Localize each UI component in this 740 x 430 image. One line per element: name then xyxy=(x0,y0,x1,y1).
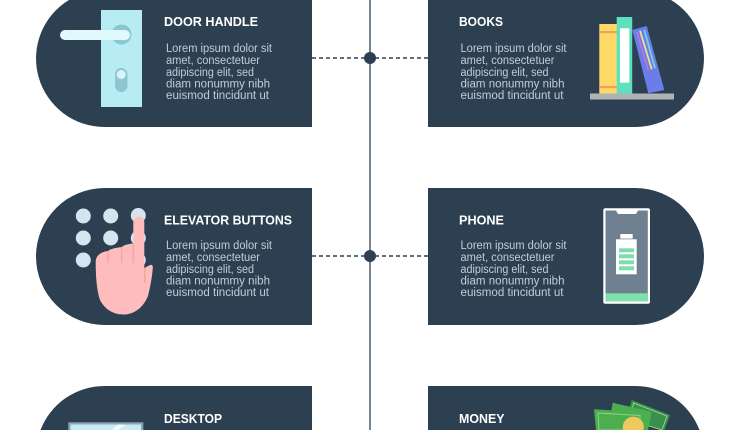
text block: books xyxy=(460,43,567,102)
heading: books: BOOKS xyxy=(459,15,503,29)
text block: elevator buttons: euismod tincidunt ut xyxy=(166,287,270,299)
heading: money: MONEY xyxy=(459,412,505,426)
text block: books: diam nonummy nibh xyxy=(460,78,564,90)
text block: phone: adipiscing elit, sed xyxy=(460,264,548,276)
text block: elevator buttons: amet, consectetuer xyxy=(166,252,260,264)
text block: elevator buttons: Lorem ipsum dolor sit xyxy=(166,240,273,252)
panel: phone xyxy=(428,188,704,325)
icon: phone with battery xyxy=(603,208,650,304)
text block: door handle: euismod tincidunt ut xyxy=(166,90,270,102)
panel: elevator buttons xyxy=(36,188,312,325)
icon: hand pressing elevator buttons xyxy=(76,208,153,314)
text block: elevator buttons: diam nonummy nibh xyxy=(166,276,270,288)
text block: door handle xyxy=(166,43,273,102)
heading: phone: PHONE xyxy=(459,214,504,228)
panel: money xyxy=(428,386,700,430)
text block: phone xyxy=(460,240,567,299)
icon: money notes and coin xyxy=(594,400,670,430)
text block: books: Lorem ipsum dolor sit xyxy=(460,43,567,55)
panel: books xyxy=(428,0,704,127)
text block: phone: euismod tincidunt ut xyxy=(460,287,564,299)
text block: elevator buttons: adipiscing elit, sed xyxy=(166,264,254,276)
central timeline xyxy=(312,0,428,430)
text block: phone: Lorem ipsum dolor sit xyxy=(460,240,567,252)
text block: door handle: diam nonummy nibh xyxy=(166,78,270,90)
panel: desktop xyxy=(40,386,312,430)
heading: desktop: DESKTOP xyxy=(164,412,222,426)
text block: door handle: adipiscing elit, sed xyxy=(166,67,254,79)
panel: door handle xyxy=(36,0,312,127)
text block: books: amet, consectetuer xyxy=(460,55,555,67)
text block: books: adipiscing elit, sed xyxy=(460,67,548,79)
icon: door handle xyxy=(60,10,142,107)
text block: door handle: Lorem ipsum dolor sit xyxy=(166,43,273,55)
text block: elevator buttons xyxy=(166,240,273,299)
icon: desktop monitor xyxy=(68,422,143,430)
text block: phone: diam nonummy nibh xyxy=(460,276,564,288)
icon: books xyxy=(590,17,674,100)
heading: elevator buttons: ELEVATOR BUTTONS xyxy=(164,214,292,228)
text block: door handle: amet, consectetuer xyxy=(166,55,260,67)
heading: door handle: DOOR HANDLE xyxy=(164,15,258,29)
text block: phone: amet, consectetuer xyxy=(460,252,555,264)
text block: books: euismod tincidunt ut xyxy=(460,90,564,102)
